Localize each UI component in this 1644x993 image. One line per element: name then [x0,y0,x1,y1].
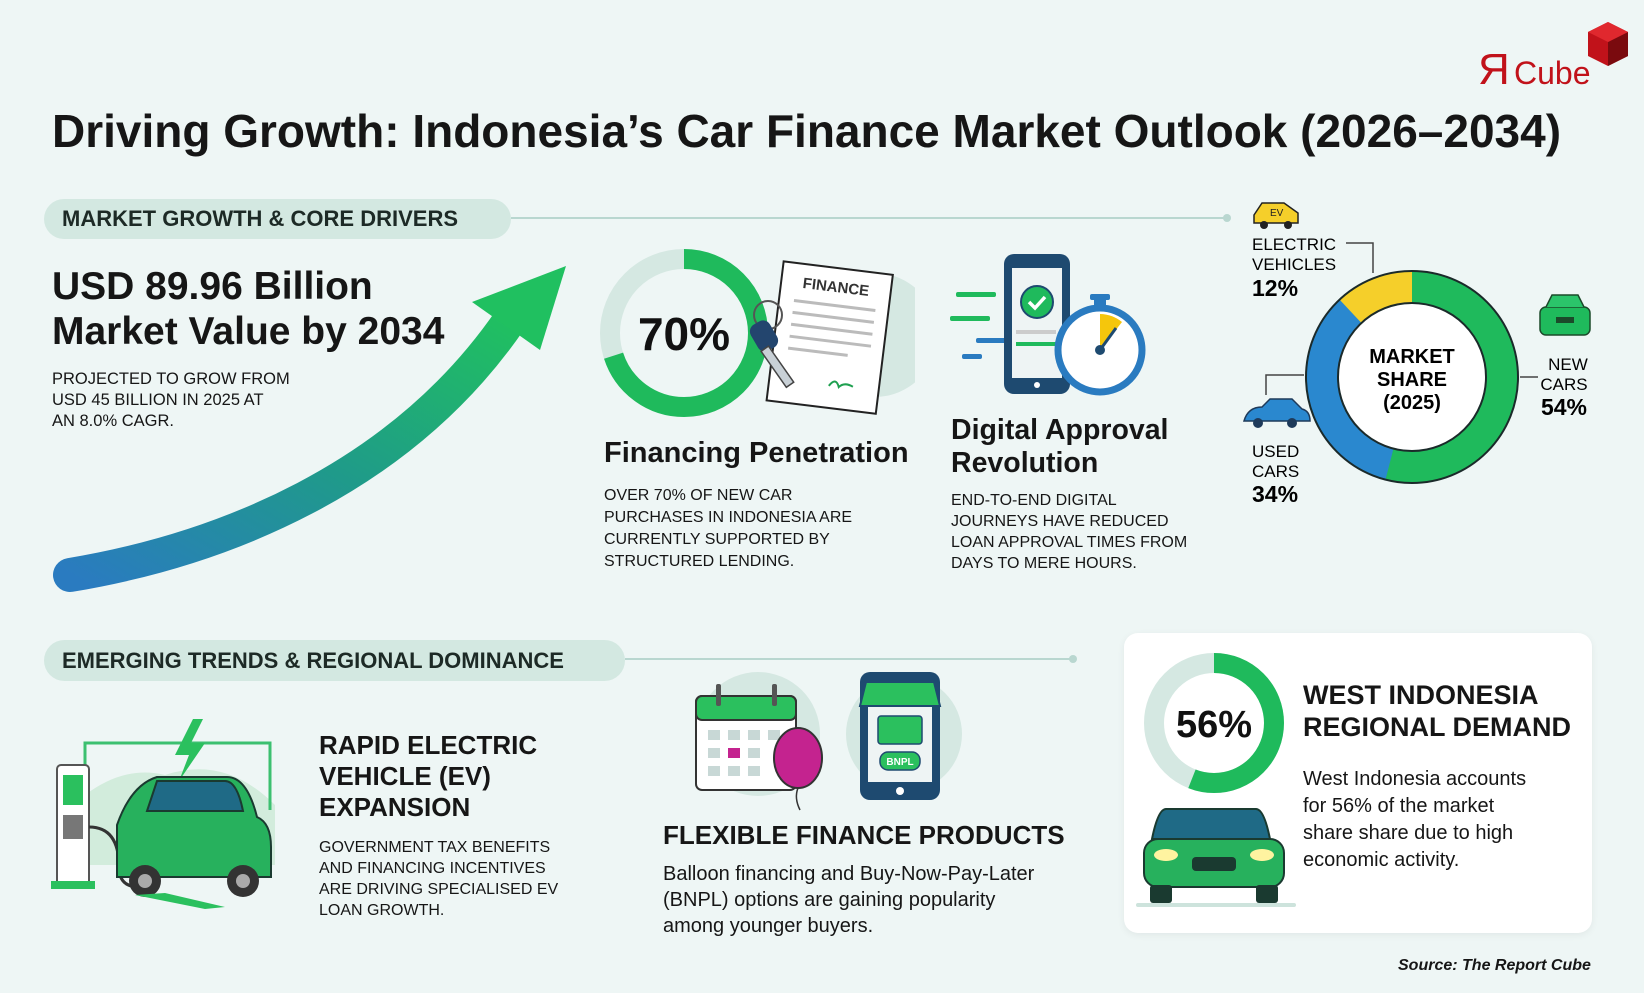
text: OVER 70% OF NEW CAR [604,487,792,504]
panel text: flexible finance products: (BNPL) options are gaining popularity [663,889,995,911]
logo [1478,22,1628,92]
title: Driving Growth: Indonesia’s Car Finance Market Outlook (2026–2034) [52,105,1561,157]
chart: market share donut: (2025) [1383,392,1441,414]
chart: market share donut: USED [1252,442,1299,461]
logo: Cube [1514,55,1590,91]
new cars [1540,307,1590,335]
panel text: rapid EV expansion: EXPANSION [319,792,470,822]
section header: emerging trends: EMERGING TRENDS & REGIONAL DOMINANCE [62,648,564,672]
text [951,492,1187,572]
text: END-TO-END DIGITAL [951,492,1117,509]
panel text: rapid EV expansion: VEHICLE (EV) [319,761,491,791]
heading: REGIONAL DEMAND [1303,712,1571,742]
panel: west indonesia card [1124,633,1592,933]
headline stat: AN 8.0% CAGR. [52,412,174,430]
donut 70%: 70% [638,308,730,360]
text: for 56% of the market [1303,795,1494,817]
icon: phone & stopwatch [950,254,1146,396]
headline stat: USD 89.96 Billion [52,265,373,308]
heading [951,414,1168,479]
chart: market share donut [1243,202,1591,507]
text: PURCHASES IN INDONESIA ARE [604,509,852,526]
chart: market share donut: EV [1270,208,1284,219]
text: economic activity. [1303,849,1459,871]
panel text: flexible finance products: FLEXIBLE FINANCE PRODUCTS [663,820,1065,850]
section header: market growth [44,199,511,239]
text: share share due to high [1303,822,1513,844]
headline stat: USD 45 BILLION IN 2025 AT [52,391,264,409]
EV label [1254,203,1298,223]
icon: EV charging car [51,719,275,909]
panel text: rapid EV expansion: LOAN GROWTH. [319,902,444,919]
panel: digital approval [950,254,1187,572]
heading: Revolution [951,447,1098,479]
panel text: rapid EV expansion: ARE DRIVING SPECIALISED EV [319,881,558,898]
chart: market share donut: NEW [1548,355,1588,374]
heading: WEST INDONESIA [1303,680,1539,710]
icons: calendar, balloon, BNPL phone: BNPL [886,757,914,768]
source: Source: The Report Cube [1398,957,1591,974]
panel text: flexible finance products: among younger buyers. [663,915,873,937]
text [604,487,852,570]
panel text: rapid EV expansion: GOVERNMENT TAX BENEFITS [319,839,550,856]
section header: emerging trends [44,640,625,681]
heading [1303,680,1571,742]
panel text: rapid EV expansion: AND FINANCING INCENTIVES [319,860,546,877]
growth arrow [53,266,566,592]
text: STRUCTURED LENDING. [604,553,794,570]
headline stat [52,265,444,430]
donut 70% [600,249,915,417]
chart: market share donut: CARS [1540,375,1588,394]
chart: market share donut: ELECTRIC [1252,235,1336,254]
chart: market share donut: 34% [1252,481,1298,507]
icon: car front [1136,808,1296,907]
panel: financing penetration [600,249,915,570]
chart: market share donut: SHARE [1377,369,1447,391]
text: West Indonesia accounts [1303,768,1526,790]
chart: market share donut: VEHICLES [1252,255,1336,274]
panel text: rapid EV expansion: RAPID ELECTRIC [319,730,537,760]
panel text: rapid EV expansion [319,730,558,919]
panel text: flexible finance products [663,820,1065,937]
chart: market share donut: MARKET [1369,346,1455,368]
chart: market share donut: CARS [1252,462,1299,481]
heading: Financing Penetration [604,437,909,469]
panel text: flexible finance products: Balloon financing and Buy-Now-Pay-Later [663,863,1034,885]
icons: calendar, balloon, BNPL phone [695,672,962,810]
text: JOURNEYS HAVE REDUCED [951,513,1169,530]
chart: market share donut: 12% [1252,275,1298,301]
text: LOAN APPROVAL TIMES FROM [951,534,1187,551]
section header: market growth: MARKET GROWTH & CORE DRIVERS [62,206,458,231]
heading: Digital Approval [951,414,1168,446]
chart: market share donut: 54% [1541,394,1587,420]
donut 56%: 56% [1176,704,1252,746]
donut 70%: FINANCE [802,275,870,300]
text: DAYS TO MERE HOURS. [951,555,1137,572]
text [1303,768,1526,871]
headline stat: PROJECTED TO GROW FROM [52,370,290,388]
headline stat: Market Value by 2034 [52,310,444,353]
text: CURRENTLY SUPPORTED BY [604,531,830,548]
used cars [1244,399,1310,421]
donut 56% [1144,653,1284,793]
